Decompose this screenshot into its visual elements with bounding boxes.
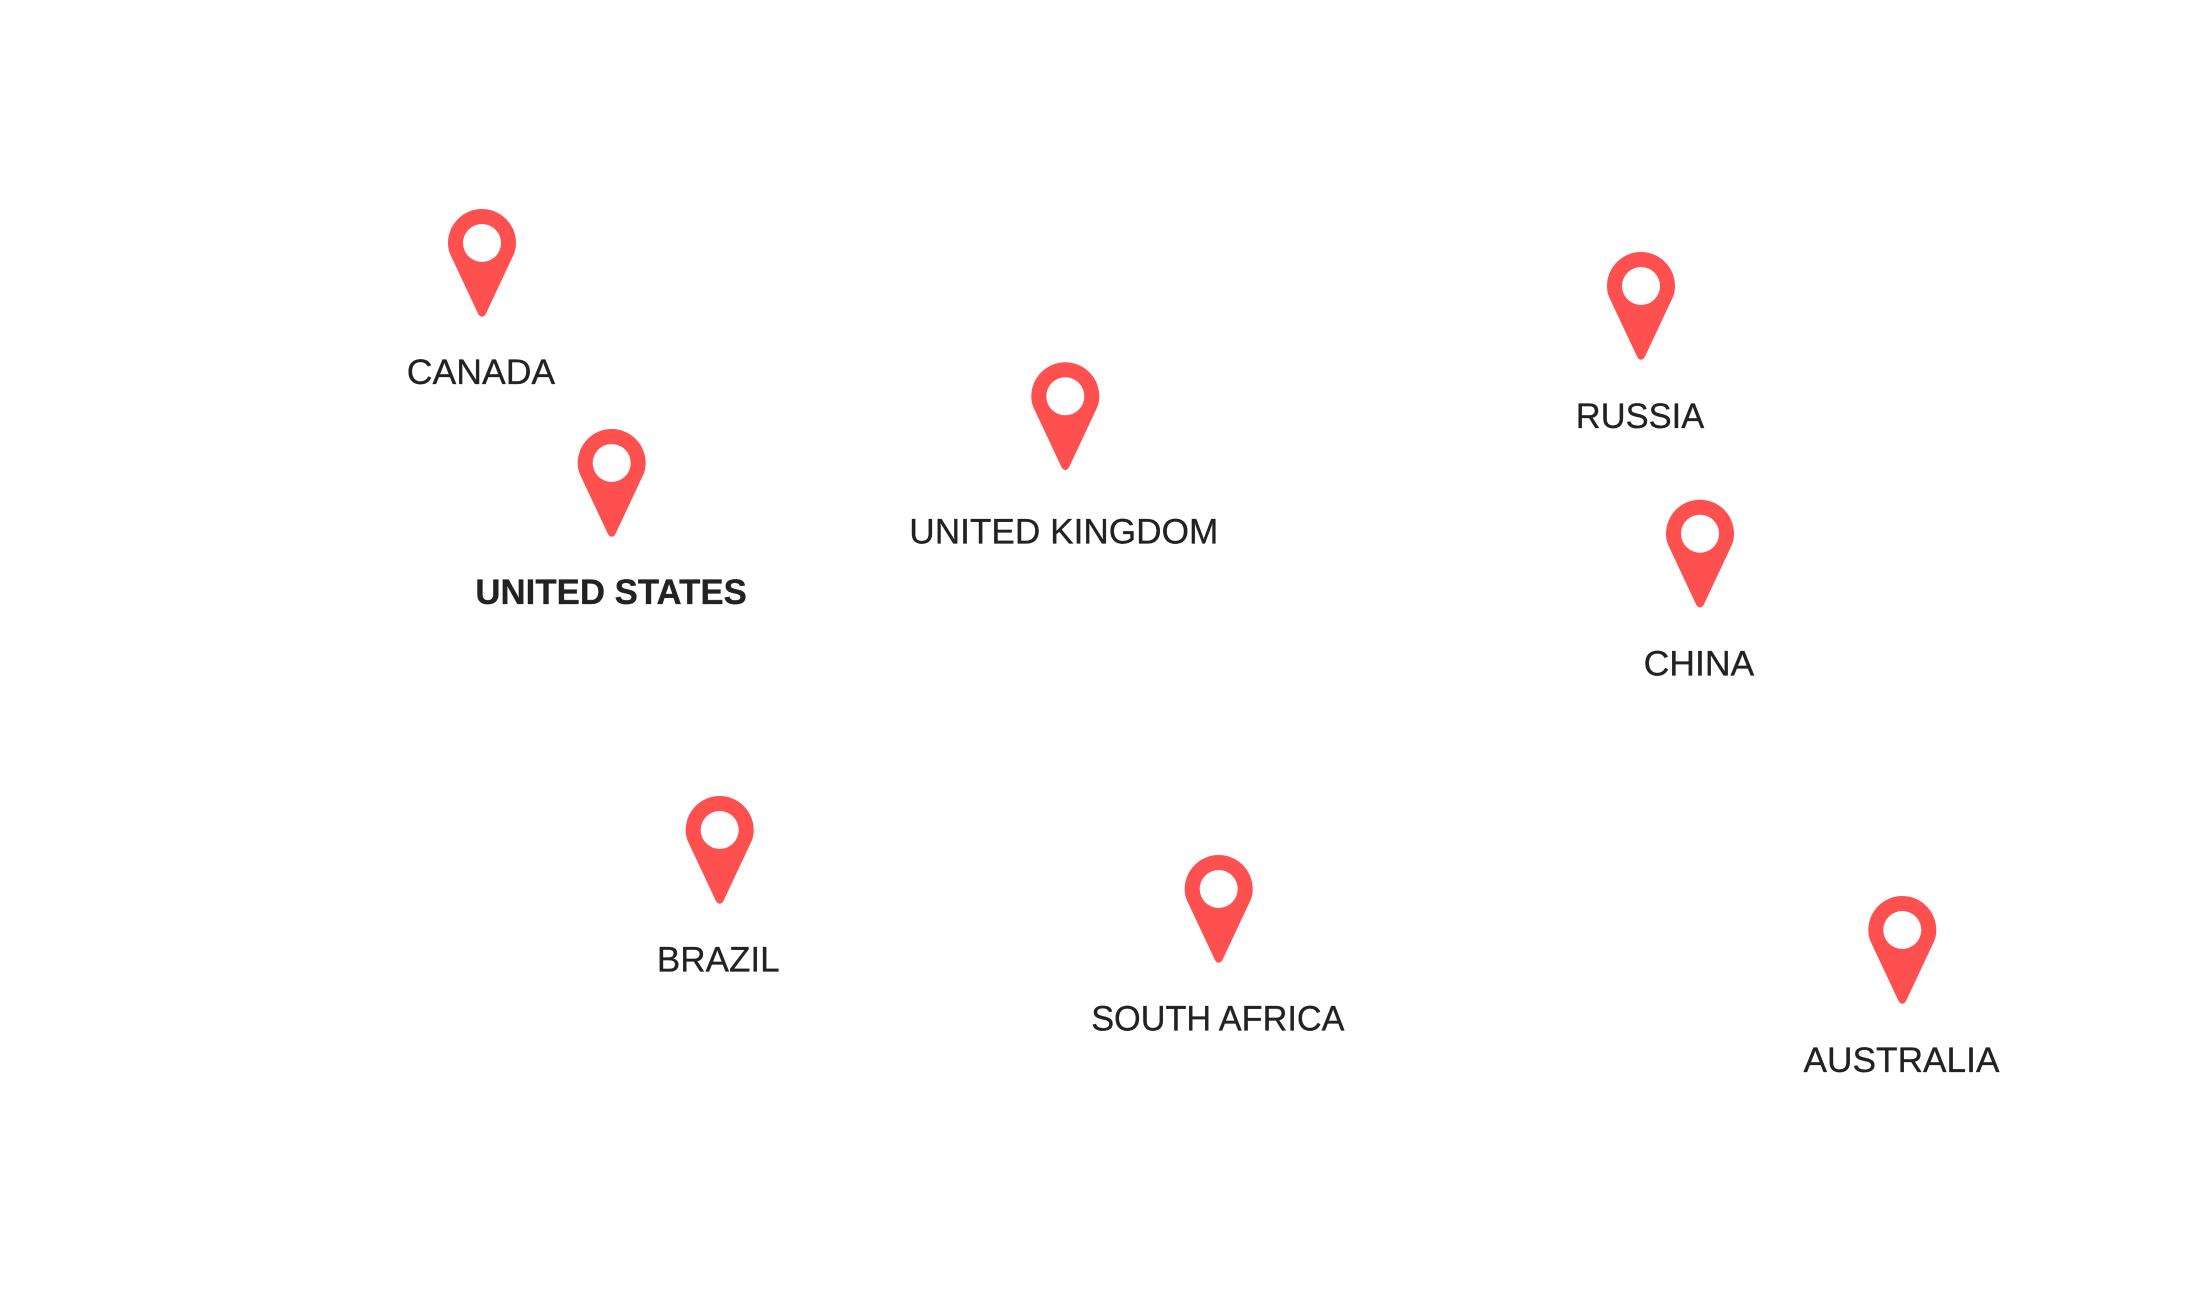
marker: Canada (407, 209, 556, 392)
marker: South Africa (1091, 855, 1345, 1039)
marker: Russia (1576, 252, 1705, 436)
marker: United Kingdom (909, 362, 1218, 551)
label: Russia: RUSSIA (1576, 397, 1705, 436)
icon: Canada map pin (448, 209, 516, 317)
marker: United States (475, 429, 747, 612)
icon: Russia map pin (1607, 252, 1675, 360)
icon: United Kingdom map pin (1031, 362, 1099, 470)
marker: Brazil (657, 796, 780, 980)
icon: China map pin (1666, 500, 1734, 607)
label: Brazil: BRAZIL (657, 941, 780, 980)
icon: South Africa map pin (1185, 855, 1253, 963)
marker: China (1644, 500, 1755, 683)
icon: Brazil map pin (686, 796, 754, 904)
label: Australia: AUSTRALIA (1804, 1041, 2000, 1080)
label: Canada: CANADA (407, 353, 556, 392)
icon: Australia map pin (1868, 896, 1936, 1004)
label: China: CHINA (1644, 644, 1755, 683)
label: United Kingdom: UNITED KINGDOM (909, 512, 1218, 551)
icon: United States map pin (578, 429, 646, 537)
marker: Australia (1804, 896, 2000, 1080)
label: United States: UNITED STATES (475, 573, 747, 612)
label: South Africa: SOUTH AFRICA (1091, 1000, 1345, 1039)
